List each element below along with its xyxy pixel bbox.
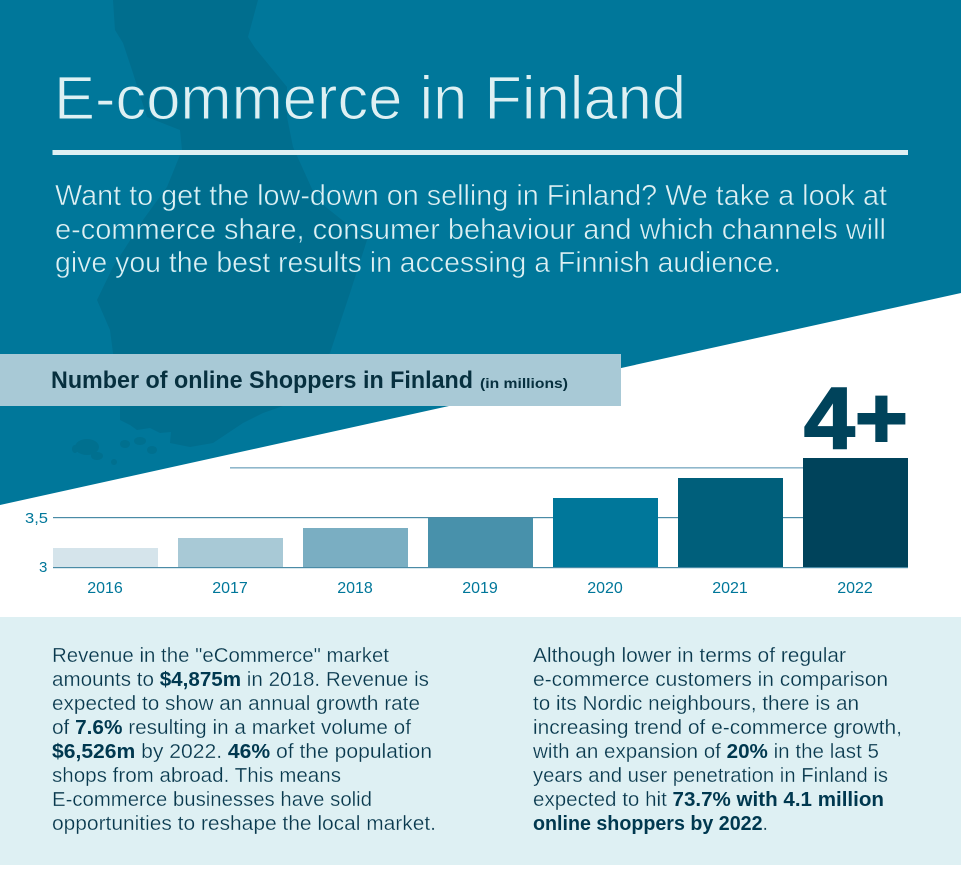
text block: revenue: shops from abroad. This means — [52, 765, 341, 787]
bar 2020 — [553, 498, 658, 568]
map of Finland silhouette — [72, 0, 367, 465]
axis label 3: 3 — [39, 559, 47, 576]
text block: growth: expected to hit 73.7% with 4.1 million — [533, 789, 884, 811]
bar 2022 — [803, 458, 908, 568]
text block: revenue: expected to show an annual growth rate — [52, 693, 420, 715]
intro text — [55, 180, 887, 279]
bar 2016 — [53, 548, 158, 568]
bar 2017 — [178, 538, 283, 568]
text block: growth — [532, 645, 902, 835]
intro text: e-commerce share, consumer behaviour and which channels will — [55, 214, 886, 246]
year labels: 2020 — [587, 580, 623, 597]
text block: growth: with an expansion of 20% in the last 5 — [532, 741, 879, 763]
bar chart: online shoppers — [25, 370, 908, 597]
chart heading unit: (in millions) — [480, 375, 568, 391]
axis label 3,5: 3,5 — [25, 510, 48, 527]
year labels: 2022 — [837, 580, 873, 597]
year labels — [87, 580, 873, 597]
panel: market summary — [0, 617, 961, 865]
intro text: Want to get the low-down on selling in Finland? We take a look at — [55, 180, 887, 212]
chart heading banner — [0, 354, 621, 406]
year labels: 2018 — [337, 580, 373, 597]
intro text: give you the best results in accessing a Finnish audience. — [55, 247, 781, 279]
text block: revenue: of 7.6% resulting in a market volume of — [52, 717, 411, 739]
year labels: 2019 — [462, 580, 498, 597]
text block: growth: online shoppers by 2022. — [533, 813, 768, 835]
text block: growth: years and user penetration in Finland is — [533, 765, 888, 787]
text block: revenue: Revenue in the "eCommerce" market — [52, 645, 389, 667]
bar 2018 — [303, 528, 408, 568]
text block: growth: Although lower in terms of regular — [533, 645, 846, 667]
text block: revenue: $6,526m by 2022. 46% of the population — [52, 741, 432, 763]
text block: revenue: amounts to $4,875m in 2018. Revenue is — [52, 669, 429, 691]
text block: revenue: opportunities to reshape the local market. — [52, 813, 436, 835]
year labels: 2017 — [212, 580, 248, 597]
panel: header background — [0, 0, 961, 505]
text block: revenue: E-commerce businesses have solid — [52, 789, 372, 811]
chart heading: Number of online Shoppers in Finland — [51, 367, 473, 394]
text block: growth: increasing trend of e-commerce growth, — [533, 717, 902, 739]
year labels: 2021 — [712, 580, 748, 597]
bar 2021 — [678, 478, 783, 568]
text block: growth: e-commerce customers in comparison — [533, 669, 888, 691]
callout: 4+: 4+ — [804, 370, 908, 467]
year labels: 2016 — [87, 580, 123, 597]
text block: revenue — [52, 645, 436, 835]
title: E-commerce in Finland — [54, 64, 686, 132]
text block: growth: to its Nordic neighbours, there is an — [533, 693, 859, 715]
title rule — [52, 150, 908, 155]
bar 2019 — [428, 518, 533, 568]
